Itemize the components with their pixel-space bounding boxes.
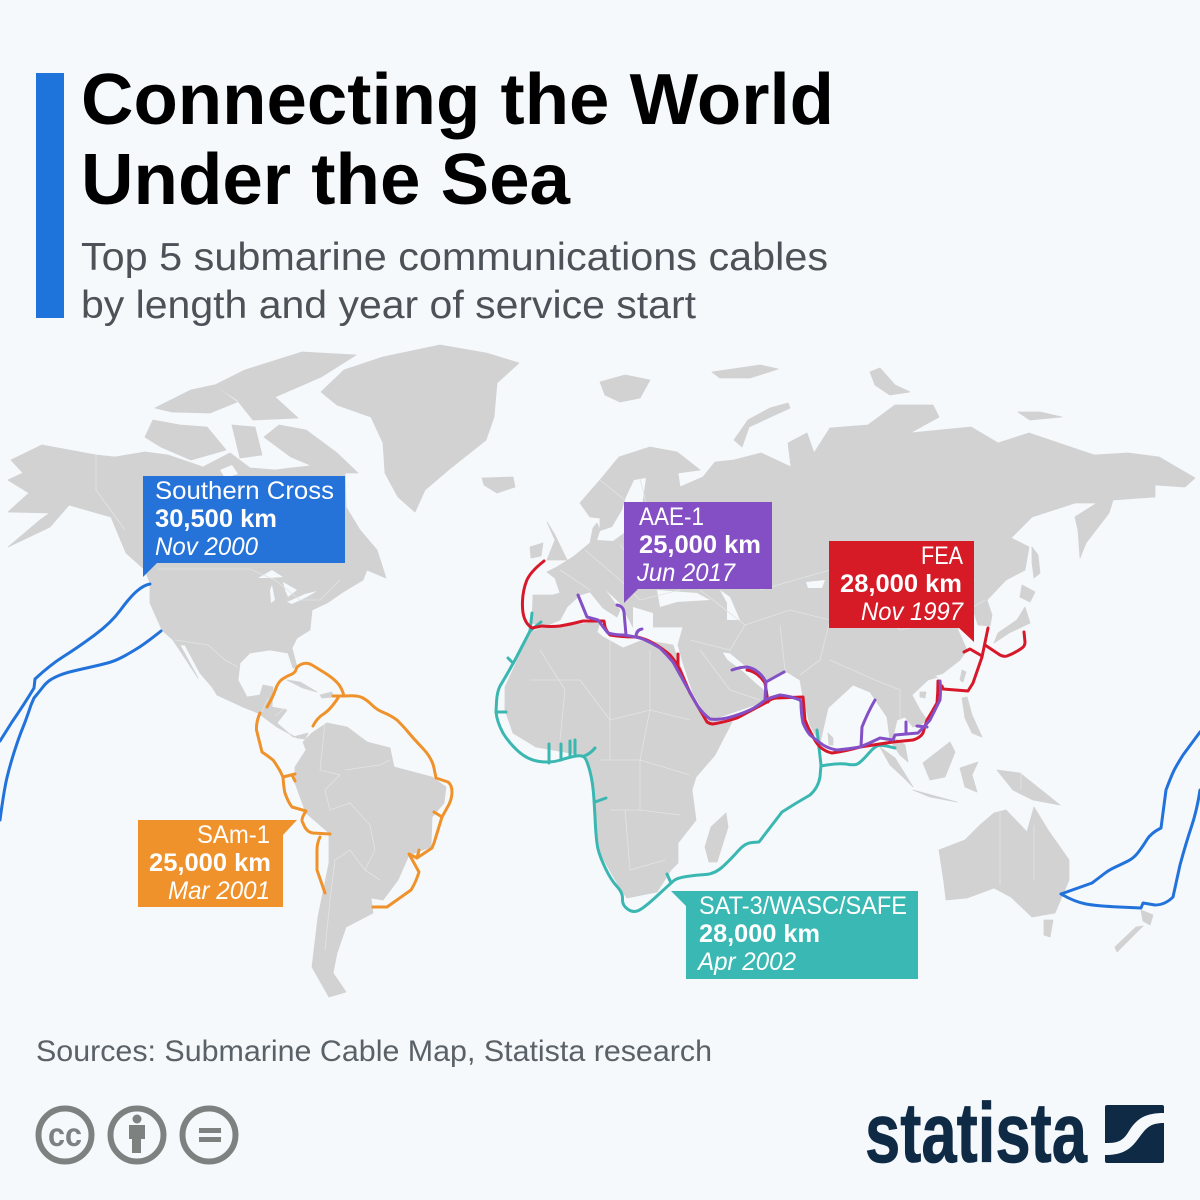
source note: Sources: Submarine Cable Map, Statista research bbox=[36, 1035, 712, 1068]
country borders bbox=[96, 455, 1034, 950]
land: Southeast Asian islands bbox=[880, 670, 1060, 805]
land: New Zealand bbox=[1115, 910, 1153, 952]
callout: Southern Cross: 30,500 km bbox=[155, 505, 277, 533]
land: Eurasia bbox=[532, 405, 1195, 762]
title: Under the Sea bbox=[81, 140, 571, 220]
callout: Southern Cross: Nov 2000 bbox=[155, 533, 258, 561]
seas and lakes bbox=[220, 465, 950, 680]
land: Greenland bbox=[321, 345, 519, 512]
cable: Southern Cross (blue) bbox=[0, 584, 1200, 908]
callout: SAm-1: Mar 2001 bbox=[168, 877, 270, 905]
callout: AAE-1: Jun 2017 bbox=[636, 559, 736, 587]
icon: creative commons bbox=[38, 1108, 92, 1162]
callout: SAm-1: 25,000 km bbox=[149, 849, 271, 877]
callout: FEA: Nov 1997 bbox=[861, 598, 964, 626]
callout: Southern Cross: Southern Cross bbox=[155, 477, 334, 505]
icon: creative commons: cc bbox=[48, 1116, 82, 1153]
land: Arctic islands of Eurasia bbox=[600, 365, 1062, 447]
cable: SAm-1 (orange) bbox=[256, 663, 452, 907]
subtitle: by length and year of service start bbox=[81, 284, 696, 327]
land: Australia bbox=[939, 807, 1069, 917]
callout: FEA bbox=[829, 541, 974, 642]
callout: SAT-3/WASC/SAFE: Apr 2002 bbox=[696, 948, 796, 976]
callout: AAE-1: AAE-1 bbox=[639, 503, 704, 531]
title: Connecting the World bbox=[81, 60, 834, 140]
land: Tasmania bbox=[1044, 920, 1053, 937]
land: Madagascar bbox=[705, 813, 728, 862]
cable: SAT-3/WASC/SAFE (teal) bbox=[496, 613, 895, 911]
land: Canadian Arctic islands bbox=[145, 352, 358, 473]
title accent bar bbox=[36, 73, 64, 318]
statista logo mark bbox=[1105, 1105, 1164, 1163]
callout: SAm-1 bbox=[138, 820, 297, 907]
icon: no derivatives bbox=[182, 1108, 236, 1162]
callout: SAT-3/WASC/SAFE bbox=[671, 891, 918, 979]
callout: FEA: FEA bbox=[921, 542, 963, 570]
land: UK and Ireland bbox=[530, 522, 567, 560]
land: Sri Lanka bbox=[828, 733, 833, 745]
statista wordmark: statista bbox=[865, 1086, 1088, 1180]
callout: SAT-3/WASC/SAFE: 28,000 km bbox=[699, 920, 820, 948]
callout: FEA: 28,000 km bbox=[840, 570, 962, 598]
cable: FEA (red) bbox=[522, 561, 1025, 753]
callout: AAE-1 bbox=[624, 502, 772, 603]
land: North and Central America bbox=[8, 445, 386, 739]
callout: SAT-3/WASC/SAFE: SAT-3/WASC/SAFE bbox=[699, 892, 907, 920]
land: Japan and Sakhalin bbox=[994, 547, 1040, 643]
callout: SAm-1: SAm-1 bbox=[197, 821, 270, 849]
subtitle bbox=[81, 236, 828, 327]
callout: AAE-1: 25,000 km bbox=[639, 531, 761, 559]
title bbox=[81, 60, 834, 220]
icon: attribution bbox=[110, 1108, 164, 1162]
land: Africa bbox=[505, 622, 732, 898]
land: South America bbox=[295, 723, 446, 997]
land: Caribbean islands bbox=[287, 680, 333, 698]
callout: Southern Cross bbox=[143, 476, 345, 577]
subtitle: Top 5 submarine communications cables bbox=[81, 236, 828, 279]
land: Iceland bbox=[482, 477, 515, 493]
world map bbox=[8, 345, 1195, 997]
cable: AAE-1 (purple) bbox=[578, 595, 940, 750]
